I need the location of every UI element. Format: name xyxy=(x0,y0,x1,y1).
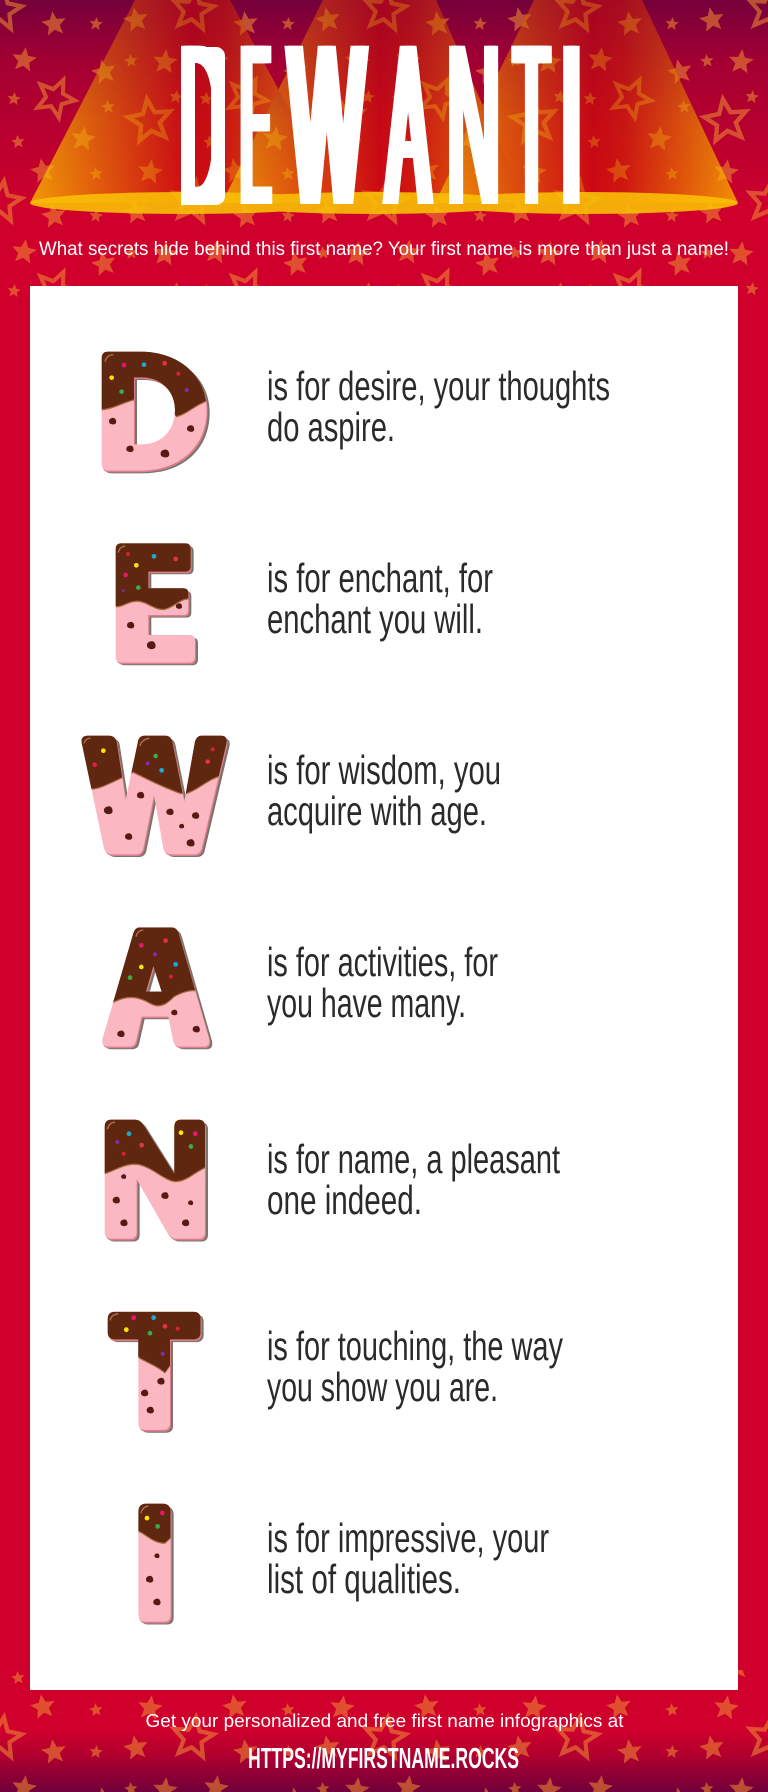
title: DEWANTI: D xyxy=(176,0,222,253)
row: I xyxy=(133,1496,549,1625)
row: E xyxy=(110,537,493,665)
title: DEWANTI xyxy=(176,0,581,253)
text: T verse: you show you are. xyxy=(267,1364,498,1410)
icon: chocolate letter W xyxy=(82,736,230,857)
text: I verse: is for impressive, your xyxy=(267,1515,549,1561)
text: A verse: is for activities, for xyxy=(267,939,498,985)
text: D verse xyxy=(267,363,610,450)
icon: chocolate letter N xyxy=(104,1120,208,1242)
title: DEWANTI: A xyxy=(382,0,424,253)
panel: white content card xyxy=(30,286,738,1690)
text: N verse: one indeed. xyxy=(267,1177,422,1223)
title: DEWANTI: I xyxy=(554,0,581,253)
title: DEWANTI: W xyxy=(284,0,359,253)
row: N xyxy=(97,1110,560,1242)
text: E verse: enchant you will. xyxy=(267,596,483,642)
title: DEWANTI: E xyxy=(237,0,267,253)
row: W xyxy=(73,727,501,857)
text: T verse xyxy=(267,1323,563,1410)
title: DEWANTI: N xyxy=(443,0,497,253)
icon: chocolate letter D xyxy=(102,352,210,474)
footer: website url: HTTPS://MYFIRSTNAME.ROCKS xyxy=(248,1743,519,1775)
text: D verse: do aspire. xyxy=(267,404,395,450)
text: W verse: is for wisdom, you xyxy=(267,747,501,793)
text: I verse xyxy=(267,1515,549,1602)
icon: chocolate letter E xyxy=(116,543,198,666)
row: A xyxy=(93,920,498,1049)
title: DEWANTI: T xyxy=(510,0,545,253)
text: N verse xyxy=(267,1136,560,1223)
icon: chocolate letter T xyxy=(108,1312,204,1433)
text: A verse xyxy=(267,939,498,1026)
subtitle: What secrets hide behind this first name? Your first name is more than just a name! xyxy=(39,239,729,260)
row: D xyxy=(93,343,610,473)
spotlight cones xyxy=(30,0,738,214)
text: W verse: acquire with age. xyxy=(267,788,487,834)
text: T verse: is for touching, the way xyxy=(267,1323,563,1369)
panel content: letters and verses xyxy=(82,352,624,1768)
text: E verse xyxy=(267,555,493,642)
text: N verse: is for name, a pleasant xyxy=(267,1136,560,1182)
footer: invitation line: Get your personalized and free first name infographics at xyxy=(146,1710,624,1731)
text: E verse: is for enchant, for xyxy=(267,555,493,601)
text: A verse: you have many. xyxy=(267,980,466,1026)
icon: chocolate letter I xyxy=(138,1504,174,1624)
text: W verse xyxy=(267,747,501,834)
row: T xyxy=(100,1303,563,1433)
icon: chocolate letter A xyxy=(102,927,212,1050)
text: I verse: list of qualities. xyxy=(267,1556,461,1602)
text: D verse: is for desire, your thoughts xyxy=(267,363,610,409)
